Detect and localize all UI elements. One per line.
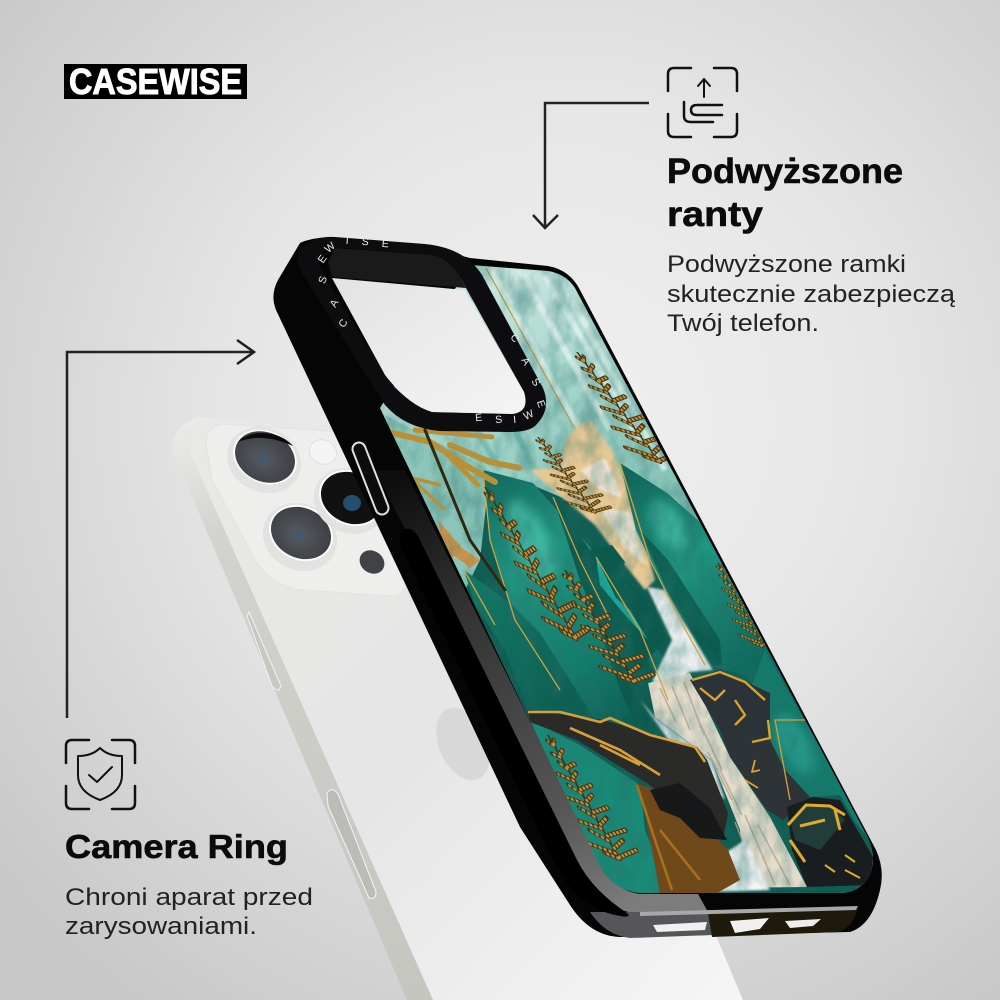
teal highlight [502,496,558,582]
camera ring [298,235,548,432]
gold branches top-left [393,430,520,590]
sensor [355,546,389,578]
side slot [400,528,628,917]
ring lettering: E [316,253,329,266]
heading: Podwyższone ranty: Podwyższone [667,152,903,191]
lens bottom [252,491,348,583]
ring lettering: S [316,275,330,285]
port speaker right [785,919,821,928]
marble texture [380,266,814,892]
ring lettering: A [519,355,532,368]
lower left teal mountain [464,570,594,718]
cloud shadow [580,458,646,565]
rock upper [690,670,770,740]
gold on upper rock [692,672,770,788]
left pale marble [385,415,490,590]
heading: Podwyższone ranty: ranty [667,195,764,234]
ring lettering: S [495,414,503,426]
icon: shield [66,740,135,809]
gold veins on mountains [464,463,805,800]
waterfall upper [647,587,713,682]
port usb [730,918,769,933]
marble streaks [470,268,665,470]
text: camera ring description [65,884,313,940]
ring lettering: S [529,376,542,389]
ring lettering: E [475,412,483,424]
heading: Podwyższone ranty [667,152,903,234]
lens right [303,456,397,546]
right lower teal [752,650,868,838]
artwork: marble landscape [380,265,878,893]
text: camera ring description: Chroni aparat przed [65,884,313,911]
apple logo shadow [426,700,500,788]
ring lettering: C [507,332,522,345]
dark cave [650,783,727,840]
gold on lower right rock [788,805,860,878]
flash [305,435,341,469]
text: raised edges description: Twój telefon. [667,310,819,337]
ring lettering: A [327,297,341,310]
protective case [273,237,882,938]
ring lettering: S [361,236,369,248]
rock centre [720,730,810,820]
ring lettering: W [322,240,338,255]
dark base [440,465,878,893]
ring lettering: I [345,235,349,247]
lower left teal panel [530,720,660,893]
icon: raised edges [668,68,737,137]
arrow: raised edges [533,103,649,228]
text: raised edges description: Podwyższone ramki [667,251,906,278]
foam [718,840,771,893]
cloud [530,420,655,590]
ring lettering: W [522,408,536,423]
power button [359,449,382,508]
waterfall ribs [660,682,790,885]
phone back [190,420,743,1000]
phone side band [172,417,700,1000]
waterfall main [648,673,807,888]
ring frame [298,237,546,432]
port speaker left [653,922,707,932]
ring lettering: E [534,399,548,409]
window [332,278,526,414]
ring lettering: C [336,317,351,330]
brown cliff [637,783,740,893]
gold trees [484,352,766,862]
dark ridge [557,510,657,712]
rear phone [172,415,743,1000]
small turquoise accent [596,557,648,640]
bottom rim highlight [640,906,858,916]
green on lower right rock [790,805,845,850]
text: camera ring description: zarysowaniami. [65,913,257,940]
ring lettering: I [513,414,517,426]
sky marble [380,265,878,893]
arrow: camera ring [67,340,254,718]
volume button upper [247,612,281,690]
text: raised edges description: skutecznie zabezpieczą [667,281,955,308]
side button lower [327,790,376,898]
large left teal mountain [484,470,663,722]
ring lettering [316,235,548,426]
lens top [216,415,312,505]
bottom face olive [708,909,858,937]
right teal mountain [620,463,805,720]
ring lettering: E [381,238,389,250]
right dark fold [640,530,722,668]
rock lower right [787,797,873,887]
rock ledge [528,710,728,840]
bottom face gray [590,912,712,938]
right mountain highlight [646,496,688,552]
gold on ledge [528,712,705,890]
text: raised edges description [667,251,955,337]
camera plateau [206,424,405,596]
case body [273,237,882,937]
gold vein [486,268,576,430]
bright right teal [773,713,818,776]
mist left of fall [640,700,725,800]
amber patch left [438,520,480,568]
logo: CASEWISE: CASEWISE [69,61,242,102]
inner dark wall [328,248,466,288]
heading: Camera Ring: Camera Ring [65,828,288,865]
translucent rim [375,470,708,914]
